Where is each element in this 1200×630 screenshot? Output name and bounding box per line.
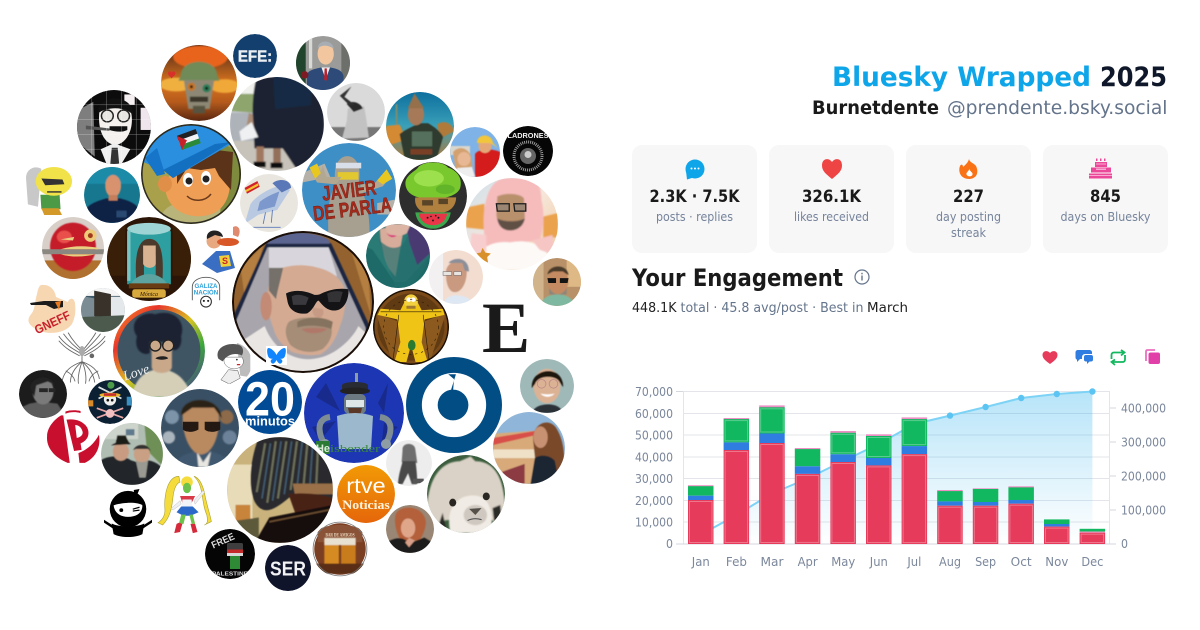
right axis labels: 0 [1121, 537, 1128, 551]
month labels [691, 555, 1103, 569]
avatar: rainbow ring woman with love [113, 305, 205, 397]
avatar: El Espanol E logo: E [482, 288, 530, 368]
left axis labels [635, 385, 673, 551]
bar: Mar [759, 405, 785, 544]
cumulative line [701, 392, 1092, 535]
avatar: SER logo: SER [270, 558, 306, 580]
card: posts and replies [632, 145, 757, 253]
avatar: sticker super hero with big nose: S [222, 256, 228, 266]
avatar: cartoon boy with Palestine flag cap [141, 124, 241, 224]
avatar: beer badge: BAR DE AMIGOS [325, 533, 355, 539]
icon: copy quotes [1146, 350, 1160, 364]
avatar: One Piece skull flag [88, 380, 132, 424]
avatar: bald sticker GNEFF: GNEFF [32, 308, 73, 337]
avatar: sticker green sailor moon [158, 476, 211, 533]
avatar: beer badge [312, 521, 368, 577]
bar: Sep [973, 488, 998, 544]
right axis labels [1121, 402, 1166, 551]
text: engagement summary: 448.1K [632, 300, 678, 316]
icon: speech bubble [686, 160, 704, 180]
panel: avatar bubble cluster [19, 34, 581, 591]
avatar: 20 minutos logo: minutos [245, 414, 295, 429]
avatar: sticker super hero with big nose [202, 226, 240, 273]
avatar: Javier de Parla mummy: DE PARLA [312, 193, 393, 226]
card: day posting streak: streak [951, 226, 986, 240]
bar: May [830, 431, 856, 544]
icon: red heart [822, 159, 842, 179]
avatar: Heisbender robot: isbender [330, 444, 381, 455]
avatar: head in a jar [107, 217, 191, 301]
avatar: blue circular logo [406, 357, 502, 453]
text: engagement summary: March [867, 300, 908, 316]
avatar: EFE logo [233, 34, 277, 78]
right axis labels: 200,000 [1121, 470, 1166, 484]
text: profile name and handle [812, 97, 1168, 119]
left axis labels: 40,000 [635, 450, 673, 464]
bar: Jun [866, 434, 892, 544]
left axis labels: 70,000 [635, 385, 673, 399]
heading: Bluesky Wrapped 2025: 2025 [1100, 62, 1167, 93]
avatar: woman in black skirt on street [230, 75, 324, 171]
month labels: Mar [760, 555, 784, 569]
avatar: head in a jar: Mónica [139, 292, 158, 298]
avatar: Heisbender robot [304, 363, 404, 463]
avatar: rtve Noticias logo: Noticias [342, 498, 390, 512]
bar: Apr [795, 448, 820, 544]
cumulative line dots [947, 388, 1096, 419]
avatar: zombie soldier with nuclear blast [159, 45, 240, 121]
avatar: stone tower door [81, 288, 125, 332]
avatar: Free Palestine fist: PALESTINE [212, 572, 248, 578]
card: posts and replies: posts · replies [656, 210, 733, 224]
avatar: Javier de Parla mummy [302, 143, 396, 237]
avatar: Zappa painted portrait [227, 437, 333, 543]
avatar: man looking up with glasses [429, 250, 483, 304]
month labels: Oct [1011, 555, 1032, 569]
card: likes received: 326.1K [802, 187, 862, 207]
bar: Feb [724, 418, 749, 544]
avatar: man in pink furry bunny costume [466, 178, 558, 270]
month labels: May [831, 555, 855, 569]
card: days on Bluesky [1043, 145, 1168, 253]
avatar: white line drawing bird skeleton [59, 333, 105, 384]
month labels: Nov [1045, 555, 1068, 569]
month labels: Feb [726, 555, 747, 569]
heading: Your Engagement: Your Engagement [631, 264, 843, 292]
card: day posting streak: day posting [936, 210, 1001, 224]
left axis labels: 50,000 [635, 428, 673, 442]
text: profile name and handle: Burnetdente [812, 97, 939, 119]
cumulative area [701, 392, 1092, 544]
avatar: sticker ninja [104, 489, 152, 537]
avatar: Groucho portrait [77, 90, 152, 164]
avatar: woman in green top [366, 224, 430, 288]
bar: Jul [902, 417, 927, 544]
avatar: couple with yellow hat [450, 127, 500, 177]
right axis labels: 100,000 [1121, 504, 1166, 518]
avatar: LADRONES punk badge: LADRONES [508, 133, 549, 140]
left axis labels: 60,000 [635, 407, 673, 421]
avatar: main profile picture in nun hood and sunglasses [232, 231, 374, 373]
month labels: Aug [939, 555, 961, 569]
avatar: man with sunglasses and big hair crowd [161, 389, 239, 467]
grid lines and axes [676, 391, 1116, 544]
bar: Aug [937, 490, 963, 544]
icon: flame [959, 159, 977, 179]
avatar: Galiza Nacion logo: GALIZA [194, 283, 218, 290]
avatar: Homer Vitruvian man [373, 289, 449, 365]
avatar: bald sticker GNEFF [28, 285, 75, 337]
month labels: Jun [869, 555, 888, 569]
chart: monthly engagement stacked bars with cumulative line [635, 385, 1166, 569]
avatar: rtve Noticias logo: rtve [346, 475, 386, 498]
bar: Jan [688, 485, 714, 544]
avatar: woman on balcony orange city [493, 412, 565, 484]
month labels: Jan [691, 555, 710, 569]
avatar: El Espanol E logo [465, 287, 547, 369]
card: day posting streak: 227 [953, 187, 984, 207]
icon: speech bubbles replies [1076, 350, 1093, 364]
icon: blue butterfly badge [266, 346, 287, 365]
avatar: man with sunglasses and beard [533, 258, 581, 306]
avatar: SER logo [265, 545, 311, 591]
avatar: Heisbender robot: He [316, 443, 330, 455]
icon: heart likes [1042, 351, 1058, 364]
avatar: Galiza Nacion logo [189, 276, 223, 309]
month labels: Apr [798, 555, 818, 569]
legend: chart series icons [1042, 350, 1160, 365]
right axis labels: 400,000 [1121, 402, 1166, 416]
avatar: rtve Noticias logo [337, 465, 395, 523]
avatar: LADRONES punk badge [503, 126, 553, 176]
text: engagement summary: total · 45.8 avg/post · Best in [680, 300, 864, 316]
avatar: black and white dancer [327, 83, 385, 141]
avatar: woman with red hair [386, 505, 434, 553]
month labels: Jul [906, 555, 921, 569]
avatar: armored bounty hunter [386, 92, 454, 160]
card: likes received [769, 145, 894, 253]
card: day posting streak [906, 145, 1031, 253]
avatar: smiling man with round glasses [520, 359, 574, 413]
avatar: sticker yellow grumpy head [26, 167, 72, 215]
avatar: rainbow ring woman with love: Love [120, 361, 151, 384]
month labels: Dec [1081, 555, 1103, 569]
bars [688, 405, 1105, 544]
right axis labels: 300,000 [1121, 436, 1166, 450]
avatar: Javier de Parla mummy: JAVIER [321, 176, 378, 206]
avatar: two men with hat and beard [101, 423, 163, 485]
card: days on Bluesky: 845 [1090, 187, 1121, 207]
avatar: carved apple with knife [42, 217, 104, 279]
bar: Oct [1008, 486, 1034, 544]
icon: repost arrows [1112, 350, 1125, 365]
avatar: Free Palestine fist: FREE [210, 531, 237, 551]
month labels: Sep [975, 555, 996, 569]
avatar: Free Palestine fist [205, 529, 255, 579]
avatar: line drawing of woman from behind [386, 440, 432, 486]
avatar: blue ink bird sketch [240, 174, 298, 232]
card: days on Bluesky: days on Bluesky [1060, 210, 1150, 224]
bar: Nov [1044, 519, 1070, 544]
card: likes received: likes received [794, 210, 869, 224]
avatar: alpaca [427, 455, 505, 533]
left axis labels: 30,000 [635, 472, 673, 486]
heading: Bluesky Wrapped 2025: Bluesky Wrapped [832, 62, 1091, 93]
avatar: lettuce hair with watermelon [399, 162, 467, 230]
avatar: black and white man with glasses [19, 370, 67, 418]
avatar: EFE logo: EFE: [238, 49, 272, 66]
avatar: man with navy scrubs [84, 167, 140, 223]
left axis labels: 20,000 [635, 494, 673, 508]
card: posts and replies: 2.3K · 7.5K [650, 187, 740, 207]
bar: Dec [1080, 529, 1105, 544]
avatar: 20 minutos logo: 20 [245, 372, 295, 426]
avatar: Galiza Nacion logo: NACIÓN [194, 288, 218, 296]
text: profile name and handle: @prendente.bsky.social [947, 97, 1168, 119]
bar highlight outlines [690, 409, 1104, 543]
avatar: red Publico P logo [47, 410, 99, 463]
icon: birthday cake [1089, 158, 1112, 178]
left axis labels: 10,000 [635, 516, 673, 530]
avatar: cartoon news anchor [296, 36, 350, 90]
avatar: cartoon woman sketch [218, 343, 250, 384]
left axis labels: 0 [666, 537, 673, 551]
panel: stat cards [632, 145, 1168, 253]
icon: info [855, 270, 869, 284]
